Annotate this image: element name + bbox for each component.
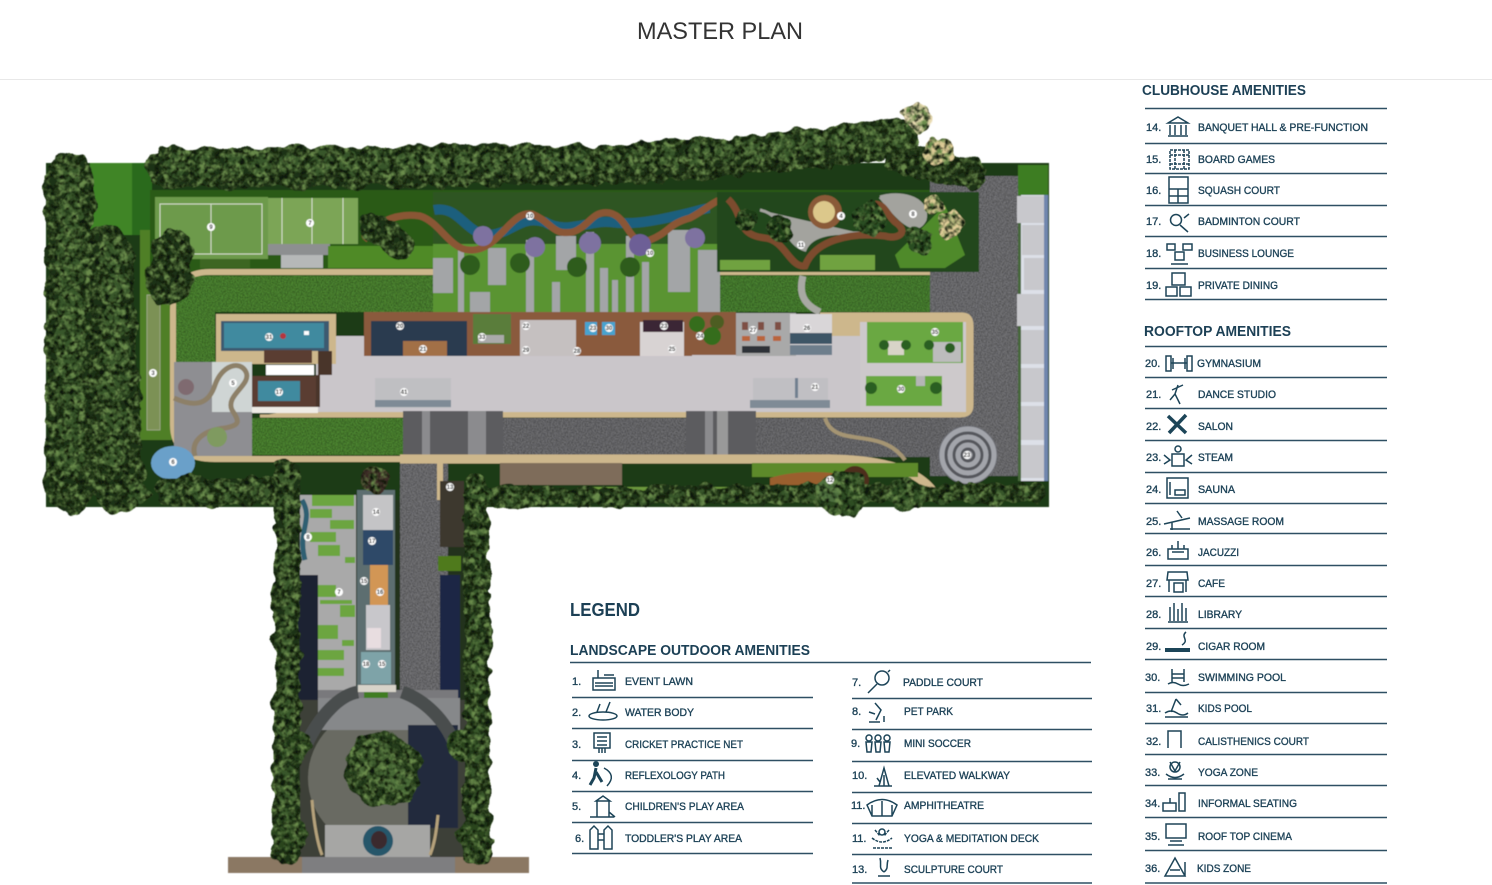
rooftop gardens <box>865 322 963 406</box>
row 26 <box>1146 541 1239 559</box>
plan number markers: 21 <box>812 385 819 391</box>
row 7: 7. <box>852 677 861 689</box>
row 35: ROOF TOP CINEMA <box>1198 831 1293 843</box>
plan number markers: 28 <box>574 349 581 355</box>
plan number markers: 10 <box>647 251 654 257</box>
entrance landscape <box>298 495 461 730</box>
curved footpath <box>801 276 820 312</box>
plan number markers: 10 <box>527 214 534 220</box>
row 11 amphitheatre: 11. <box>851 800 865 812</box>
row 15: BOARD GAMES <box>1198 154 1275 166</box>
soccer and paddle courts <box>155 197 438 268</box>
row 5 <box>572 796 745 817</box>
plan number markers: 13 <box>447 485 454 491</box>
row 9 <box>851 735 971 752</box>
podium roof details <box>375 378 830 408</box>
row 23 <box>1146 446 1233 466</box>
row 1: 1. <box>572 676 581 688</box>
grey building podium <box>316 336 868 412</box>
row 27 <box>1146 572 1225 592</box>
golden trees <box>902 103 963 238</box>
row 8: 8. <box>852 706 861 718</box>
plan number markers: 20 <box>397 324 404 330</box>
plan number markers: 8 <box>911 212 915 218</box>
plan number markers: 33 <box>479 335 486 341</box>
row 5: CHILDREN'S PLAY AREA <box>625 801 745 813</box>
road paving stripes <box>403 411 756 456</box>
plan number markers: 27 <box>750 328 757 334</box>
row 6: 6. <box>575 833 584 845</box>
row 22: SALON <box>1198 421 1233 433</box>
row 8 <box>852 703 954 722</box>
row 7: PADDLE COURT <box>903 677 983 689</box>
row 19 <box>1146 273 1278 296</box>
row 8: PET PARK <box>904 706 954 718</box>
plan number markers: 7 <box>308 221 312 227</box>
row 1: EVENT LAWN <box>625 676 693 688</box>
row 28 <box>1146 603 1243 622</box>
row 11 yoga deck <box>852 829 1040 848</box>
row 2 <box>572 702 695 720</box>
plan number markers <box>149 210 971 668</box>
plan number markers: 23 <box>661 324 668 330</box>
clubhouse block <box>357 490 396 698</box>
row 25 <box>1146 511 1284 530</box>
row 33: 33. <box>1145 767 1160 779</box>
row 22: 22. <box>1146 421 1161 433</box>
plan number markers: 12 <box>827 478 834 484</box>
plan number markers: 8 <box>306 535 310 541</box>
row 10: ELEVATED WALKWAY <box>904 770 1011 782</box>
row 18: BUSINESS LOUNGE <box>1198 248 1294 260</box>
panel: clubhouse amenities <box>1142 83 1387 300</box>
plan number markers: 31 <box>266 335 273 341</box>
ground base <box>46 163 1049 860</box>
roads <box>400 176 1020 695</box>
panel: rooftop amenities <box>1144 324 1387 883</box>
entrance base strip <box>228 857 529 873</box>
row 21: 21. <box>1146 389 1161 401</box>
row 3: CRICKET PRACTICE NET <box>625 739 743 751</box>
plan number markers: 24 <box>697 334 704 340</box>
row 17: BADMINTON COURT <box>1198 216 1300 228</box>
row 24: SAUNA <box>1198 484 1236 496</box>
row 19: PRIVATE DINING <box>1198 280 1278 292</box>
row 4 <box>572 761 725 786</box>
row 14: BANQUET HALL & PRE-FUNCTION <box>1198 122 1368 134</box>
row 25: MASSAGE ROOM <box>1198 516 1284 528</box>
plan number markers: 30 <box>606 326 613 332</box>
row 35: 35. <box>1145 831 1160 843</box>
water feature <box>151 446 195 480</box>
row 19: 19. <box>1146 280 1161 292</box>
row 2: 2. <box>572 707 581 719</box>
row 26: JACUZZI <box>1198 547 1239 559</box>
plan number markers: 7 <box>337 590 341 596</box>
row 17 <box>1146 214 1300 232</box>
heading: legend: LEGEND <box>570 600 640 620</box>
tree belts dark layer <box>70 138 1035 852</box>
row 21 <box>1146 385 1276 404</box>
row 34 <box>1145 793 1297 811</box>
row 26: 26. <box>1146 547 1161 559</box>
plan number markers: 35 <box>932 330 939 336</box>
plan number markers: 23 <box>590 326 597 332</box>
row 13: 13. <box>852 864 867 876</box>
plan number markers: 41 <box>401 390 408 396</box>
plan number markers: 6 <box>171 460 175 466</box>
plan number markers: 11 <box>798 243 805 249</box>
row 13: SCULPTURE COURT <box>904 864 1003 876</box>
row 3: 3. <box>572 739 581 751</box>
row 30 <box>1145 669 1286 686</box>
row 11 yoga deck: 11. <box>852 833 866 845</box>
row 5: 5. <box>572 801 581 813</box>
row 27: CAFE <box>1198 578 1225 590</box>
row 1 <box>572 670 693 690</box>
row 36 <box>1145 858 1251 876</box>
row 25: 25. <box>1146 516 1161 528</box>
row 34: 34. <box>1145 798 1160 810</box>
row 35 <box>1145 824 1293 845</box>
row 32: CALISTHENICS COURT <box>1198 736 1309 748</box>
row 4: 4. <box>572 770 581 782</box>
row 31: 31. <box>1146 703 1161 715</box>
plan number markers: 22 <box>523 324 530 330</box>
row 15: 15. <box>1146 154 1161 166</box>
row 9: 9. <box>851 738 860 750</box>
row 13 <box>852 858 1003 876</box>
main lawns <box>176 276 930 455</box>
row 9: MINI SOCCER <box>904 738 971 750</box>
row 30: 30. <box>1145 672 1160 684</box>
plan number markers: 16 <box>377 590 384 596</box>
row 23: STEAM <box>1198 452 1233 464</box>
row 18: 18. <box>1146 248 1161 260</box>
main swimming pool <box>221 321 332 407</box>
row 10: 10. <box>852 770 867 782</box>
row 32 <box>1146 731 1309 748</box>
trees <box>70 103 1035 853</box>
plan number markers: 15 <box>361 579 368 585</box>
row 2: WATER BODY <box>625 707 695 719</box>
tree belts mid layer <box>70 135 1030 850</box>
row 14: 14. <box>1146 122 1161 134</box>
row 11 amphitheatre <box>851 800 984 816</box>
play area <box>174 362 252 456</box>
row 36: 36. <box>1145 863 1160 875</box>
row 18 <box>1146 244 1294 264</box>
feature trees <box>272 201 934 853</box>
row 28: 28. <box>1146 609 1161 621</box>
central garden <box>364 192 735 312</box>
plan number markers: 18 <box>363 662 370 668</box>
row 10 <box>852 768 1011 786</box>
plan number markers: 25 <box>669 347 676 353</box>
south garden strip <box>380 418 938 547</box>
row 16: SQUASH COURT <box>1198 185 1280 197</box>
row 16: 16. <box>1146 185 1161 197</box>
row 33: YOGA ZONE <box>1198 767 1258 779</box>
row 30: SWIMMING POOL <box>1198 672 1286 684</box>
plan number markers: 26 <box>804 326 811 332</box>
kids pool <box>252 376 318 413</box>
row 28: LIBRARY <box>1198 609 1243 621</box>
row 20: 20. <box>1145 358 1160 370</box>
tan ring east <box>260 314 972 416</box>
plan number markers: 15 <box>379 662 386 668</box>
plan number markers: 5 <box>231 381 235 387</box>
row 15 <box>1146 150 1275 169</box>
panel: landscape outdoor amenities <box>570 643 1092 883</box>
heading: clubhouse amenities: CLUBHOUSE AMENITIES <box>1142 83 1306 99</box>
plan number markers: 3 <box>151 371 155 377</box>
plan number markers: 9 <box>209 225 213 231</box>
row 4: REFLEXOLOGY PATH <box>625 770 725 782</box>
row 11 amphitheatre: AMPHITHEATRE <box>904 800 984 812</box>
plan number markers: 23 <box>964 453 971 459</box>
plan number markers: 17 <box>369 539 376 545</box>
row 32: 32. <box>1146 736 1161 748</box>
row 20: GYMNASIUM <box>1197 358 1261 370</box>
row 22 <box>1146 415 1233 433</box>
spiral sculpture court <box>939 426 997 484</box>
title: MASTER PLAN <box>637 18 803 45</box>
row 29 <box>1146 632 1265 653</box>
row 29: 29. <box>1146 641 1161 653</box>
plan number markers: 4 <box>839 214 843 220</box>
row 6 <box>575 826 743 849</box>
plan number markers: 30 <box>898 387 905 393</box>
plan number markers: 14 <box>373 510 380 516</box>
row 31: KIDS POOL <box>1198 703 1252 715</box>
site plan illustration <box>46 103 1049 873</box>
row 20 <box>1145 356 1261 371</box>
row 17: 17. <box>1146 216 1161 228</box>
row 27: 27. <box>1146 578 1161 590</box>
east residences <box>1017 165 1048 481</box>
row 14 <box>1146 117 1368 136</box>
row 3 <box>572 733 743 753</box>
plan number markers: 17 <box>276 390 283 396</box>
row 23: 23. <box>1146 452 1161 464</box>
plan number markers: 21 <box>420 347 427 353</box>
row 24 <box>1146 478 1236 498</box>
east garden <box>717 192 979 272</box>
row 6: TODDLER'S PLAY AREA <box>625 833 743 845</box>
tan pathway ring <box>173 272 1000 459</box>
row 24: 24. <box>1146 484 1161 496</box>
heading: landscape outdoor amenities: LANDSCAPE OUTDOOR AMENITIES <box>570 643 810 659</box>
row 11 yoga deck: YOGA & MEDITATION DECK <box>904 833 1040 845</box>
plan number markers: 29 <box>523 348 530 354</box>
amenity strip <box>216 312 832 364</box>
heading: rooftop amenities: ROOFTOP AMENITIES <box>1144 324 1291 340</box>
row 16 <box>1146 177 1280 203</box>
row 7 <box>852 670 983 693</box>
row 31 <box>1146 699 1252 717</box>
row 29: CIGAR ROOM <box>1198 641 1265 653</box>
row 21: DANCE STUDIO <box>1198 389 1276 401</box>
legend panels <box>570 83 1387 883</box>
row 33 <box>1145 762 1258 779</box>
row 36: KIDS ZONE <box>1197 863 1251 875</box>
row 34: INFORMAL SEATING <box>1198 798 1297 810</box>
drop-off circle <box>300 692 470 860</box>
